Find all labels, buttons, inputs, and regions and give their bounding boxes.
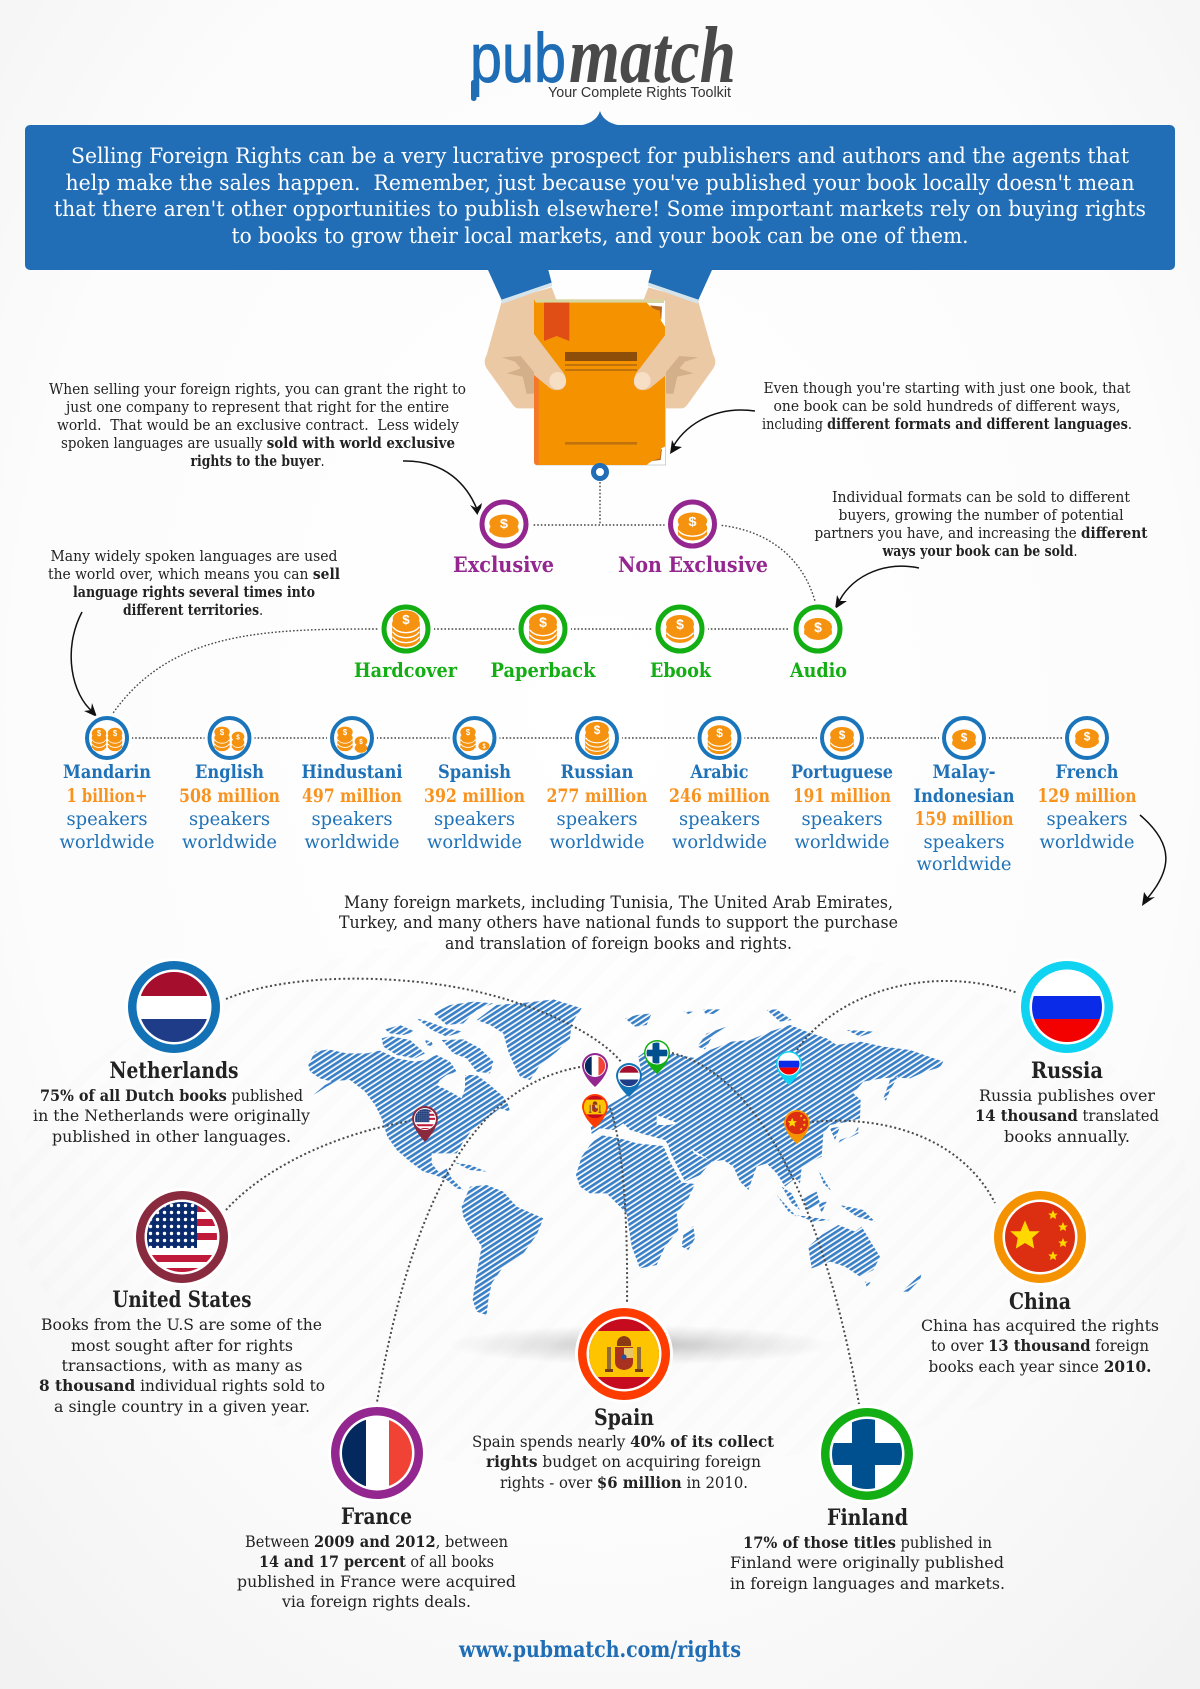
language: French: French: [1056, 762, 1119, 783]
format: Paperback: Paperback: [490, 658, 597, 682]
purple option: Exclusive: Exclusive: [453, 552, 554, 577]
banner: to books to grow their local markets, and your book can be one of them.: [232, 224, 968, 249]
language: Arabic: speakers: [679, 809, 760, 830]
language: Russian: worldwide: [550, 832, 645, 853]
country: Finland: [730, 1405, 1005, 1593]
country: China: China has acquired the rights: [921, 1316, 1159, 1335]
purple option: Non Exclusive: [618, 496, 768, 577]
language: Hindustani: 497 million: [302, 786, 402, 807]
text: one book note: [762, 381, 1132, 433]
language: French: [1038, 713, 1137, 853]
language: Spanish: Spanish: [438, 762, 511, 783]
country: France: [237, 1404, 516, 1611]
text: national funds note: Many foreign markets, including Tunisia, The United Arab Emirates,: [344, 893, 893, 912]
country: Spain: rights budget on acquiring foreign: [486, 1452, 761, 1471]
language: French: speakers: [1046, 809, 1128, 830]
language: Malay-Indonesian: Malay-: [932, 762, 996, 783]
format: Audio: Audio: [789, 658, 847, 682]
text: language rights note: the world over, which means you can sell: [48, 566, 340, 583]
format: Ebook: [650, 601, 712, 682]
format: Ebook: Ebook: [650, 658, 712, 682]
format: Hardcover: [354, 601, 457, 682]
language: French: 129 million: [1038, 786, 1137, 807]
language: Malay-Indonesian: speakers: [924, 832, 1004, 853]
language: Mandarin: speakers: [66, 809, 148, 830]
pin: China: [784, 1110, 810, 1144]
country: Netherlands: in the Netherlands were originally: [33, 1106, 310, 1125]
language: Mandarin: [60, 713, 155, 853]
format: Paperback: [490, 601, 597, 682]
language: Portuguese: speakers: [802, 809, 882, 830]
country: Finland: 17% of those titles published in: [743, 1533, 992, 1552]
text: formats note: [814, 490, 1148, 560]
text: exclusive rights note: When selling your foreign rights, you can grant the right to: [49, 382, 466, 398]
country: Russia: books annually.: [1004, 1127, 1130, 1146]
text: one book note: one book can be sold hundreds of different ways,: [774, 399, 1120, 415]
country: Finland: Finland: [827, 1505, 908, 1531]
language: French: worldwide: [1040, 832, 1135, 853]
pin: Russia: [776, 1051, 802, 1085]
country: Finland: in foreign languages and markets.: [730, 1574, 1005, 1593]
language: Portuguese: 191 million: [793, 786, 891, 807]
country: United States: United States: [112, 1287, 252, 1313]
shadow under map: [445, 1325, 835, 1365]
icon: right cuff and hand back: [643, 270, 715, 408]
language: Malay-Indonesian: 159 million: [914, 809, 1014, 830]
text: formats note: Individual formats can be sold to different: [832, 490, 1130, 506]
country: United States: 8 thousand individual rights sold to: [39, 1376, 325, 1395]
text: formats note: ways your book can be sold.: [882, 543, 1078, 560]
map connectors: [226, 979, 1018, 1404]
country: Russia: [975, 958, 1159, 1146]
language: Malay-Indonesian: Indonesian: [914, 786, 1015, 807]
country: China: China: [1009, 1289, 1071, 1315]
country: Spain: rights - over $6 million in 2010.: [500, 1473, 748, 1492]
text: exclusive rights note: world. That would be an exclusive contract. Less widely: [57, 418, 460, 434]
logo: [470, 12, 736, 101]
language: Arabic: Arabic: [690, 762, 748, 783]
text: national funds note: Turkey, and many others have national funds to support the purchase: [339, 913, 898, 932]
country: United States: Books from the U.S are some of the: [41, 1315, 322, 1334]
icon: right fingers: [634, 334, 666, 390]
text: exclusive rights note: rights to the buyer.: [190, 453, 324, 470]
book node: [594, 466, 606, 478]
country: Netherlands: [33, 958, 310, 1146]
language: Spanish: 392 million: [424, 786, 525, 807]
country: France: published in France were acquired: [237, 1572, 516, 1591]
language: Mandarin: Mandarin: [63, 762, 151, 783]
language: Spanish: worldwide: [427, 832, 522, 853]
language: Russian: 277 million: [546, 786, 648, 807]
logo: pub: [470, 19, 566, 97]
faint map hatch: [10, 930, 1190, 1470]
format: Hardcover: Hardcover: [354, 658, 457, 682]
format: Audio: [789, 601, 847, 682]
language: Arabic: worldwide: [672, 832, 767, 853]
text: one book note: Even though you're starting with just one book, that: [764, 381, 1131, 397]
country: France: France: [341, 1504, 412, 1530]
pin: Spain: [582, 1094, 608, 1128]
country: Russia: 14 thousand translated: [975, 1106, 1159, 1125]
connectors: tree lines: [111, 482, 1066, 738]
country: France: 14 and 17 percent of all books: [259, 1552, 494, 1571]
language: Spanish: speakers: [434, 809, 515, 830]
banner: [25, 111, 1175, 270]
country: United States: [39, 1188, 325, 1416]
language: English: worldwide: [182, 832, 277, 853]
language: Arabic: 246 million: [669, 786, 770, 807]
text: national funds note: [339, 893, 898, 953]
text: formats note: partners you have, and increasing the different: [814, 525, 1148, 542]
language: Portuguese: worldwide: [794, 832, 890, 853]
language: English: 508 million: [179, 786, 280, 807]
purple option: Non Exclusive: Non Exclusive: [618, 552, 768, 577]
country: Netherlands: published in other languages.: [52, 1127, 291, 1146]
country: Spain: [472, 1305, 775, 1492]
language: Malay-Indonesian: worldwide: [916, 854, 1012, 875]
logo: Your Complete Rights Toolkit: [548, 85, 731, 101]
pin: Finland: [644, 1040, 670, 1074]
country: Russia: Russia: [1031, 1058, 1103, 1084]
country: Finland: Finland were originally published: [730, 1553, 1004, 1572]
icon: book: [534, 299, 666, 465]
language: Portuguese: Portuguese: [791, 762, 893, 783]
illustration: hands holding book: [485, 270, 715, 465]
text: exclusive rights note: [49, 382, 466, 470]
country: France: via foreign rights deals.: [281, 1592, 471, 1611]
text: language rights note: Many widely spoken languages are used: [50, 549, 338, 565]
pin: United States: [412, 1106, 438, 1142]
language: Spanish: [424, 713, 525, 853]
language: Hindustani: [302, 713, 402, 853]
language: English: speakers: [189, 809, 270, 830]
country: China: [921, 1188, 1159, 1376]
language: English: [179, 713, 280, 853]
banner: Selling Foreign Rights can be a very lucrative prospect for publishers and authors and the agents that: [71, 144, 1129, 169]
text: one book note: including different formats and different languages.: [762, 416, 1132, 433]
footer url: www.pubmatch.com/rights: [458, 1637, 741, 1663]
country: Spain: Spain spends nearly 40% of its collect: [472, 1432, 775, 1451]
banner: that there aren't other opportunities to publish elsewhere! Some important markets rely on buying rights: [54, 197, 1146, 222]
arrows: [71, 410, 1166, 906]
language: Hindustani: speakers: [312, 809, 392, 830]
text: language rights note: language rights several times into: [73, 584, 315, 601]
country: China: books each year since 2010.: [928, 1357, 1152, 1376]
language: Mandarin: 1 billion+: [66, 786, 148, 807]
language: Russian: [546, 713, 648, 853]
country: Netherlands: Netherlands: [110, 1058, 238, 1084]
country: Spain: Spain: [594, 1405, 654, 1431]
purple option: Exclusive: [453, 496, 554, 577]
country: United States: a single country in a given year.: [54, 1397, 310, 1416]
language: Mandarin: worldwide: [60, 832, 155, 853]
country: United States: transactions, with as many as: [62, 1356, 302, 1375]
language: Malay-Indonesian: [914, 713, 1015, 875]
banner: help make the sales happen. Remember, just because you've published your book locally doesn't mean: [66, 171, 1135, 196]
icon: left cuff and hand back: [485, 270, 557, 408]
country: China: to over 13 thousand foreign: [931, 1336, 1149, 1355]
language: English: English: [195, 762, 264, 783]
country: Russia: Russia publishes over: [979, 1086, 1155, 1105]
pin: France: [582, 1053, 608, 1087]
language: Arabic: [669, 713, 770, 853]
pin: Netherlands: [616, 1063, 642, 1097]
language: Russian: speakers: [556, 809, 638, 830]
country: Netherlands: 75% of all Dutch books published: [40, 1086, 303, 1105]
text: exclusive rights note: spoken languages are usually sold with world exclusive: [61, 435, 455, 452]
language: Portuguese: [791, 713, 893, 853]
text: language rights note: different territories.: [123, 602, 263, 619]
text: language rights note: [48, 549, 340, 619]
icon: left fingers: [534, 334, 566, 390]
text: formats note: buyers, growing the number of potential: [838, 508, 1124, 524]
world map: [308, 1000, 944, 1314]
text: national funds note: and translation of foreign books and rights.: [445, 934, 792, 953]
language: Russian: Russian: [560, 762, 634, 783]
country: France: Between 2009 and 2012, between: [245, 1532, 508, 1551]
logo: match: [569, 12, 736, 100]
language: Hindustani: Hindustani: [302, 762, 402, 783]
country: United States: most sought after for rights: [71, 1336, 293, 1355]
text: exclusive rights note: just one company to represent that right for the entire: [64, 400, 449, 416]
language: Hindustani: worldwide: [304, 832, 400, 853]
